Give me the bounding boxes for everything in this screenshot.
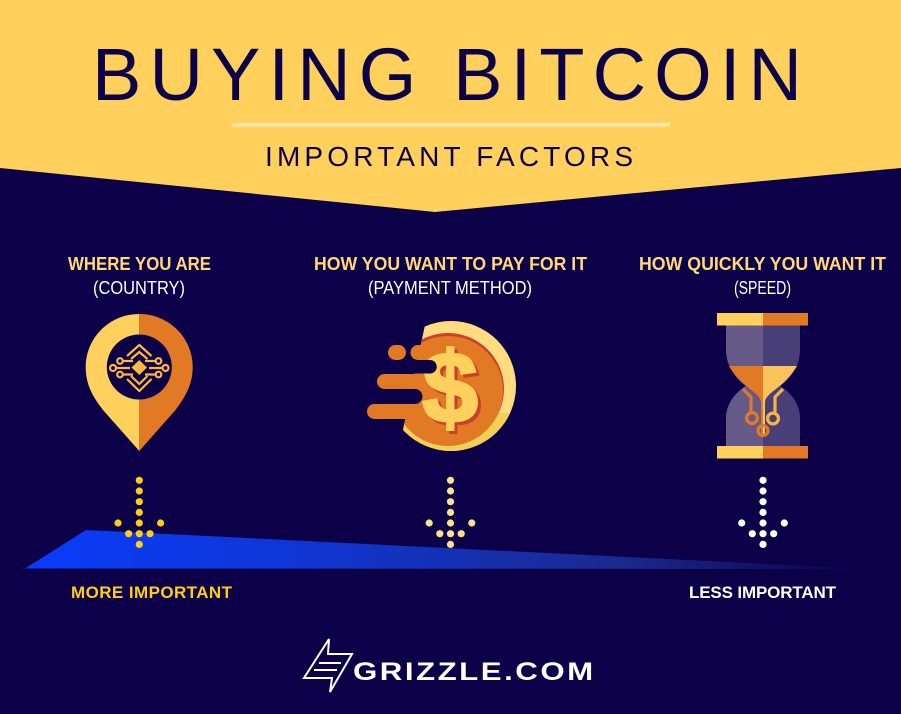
label: less important: LESS IMPORTANT (689, 583, 837, 602)
subtitle: IMPORTANT FACTORS (265, 141, 633, 172)
icon: location pin (86, 314, 193, 451)
icon: circuit traces (743, 389, 783, 436)
arrow: pale dots (426, 477, 475, 548)
arrow: yellow dots (114, 477, 164, 548)
column heading: payment method: HOW YOU WANT TO PAY FOR IT (314, 253, 588, 274)
icon: hourglass (717, 313, 808, 458)
column heading: speed (639, 253, 887, 298)
title underline (232, 123, 670, 126)
wordmark: GRIZZLE.COM (353, 657, 596, 685)
importance ramp (25, 530, 868, 569)
label: more important: MORE IMPORTANT (71, 583, 233, 602)
bottom cap (717, 446, 763, 458)
dollar sign: $ (425, 335, 481, 447)
arrow: white dots (738, 477, 788, 548)
icon: dollar coin: $ (422, 332, 478, 444)
title: BUYING BITCOIN (92, 33, 802, 116)
column heading: payment method: (PAYMENT METHOD) (368, 278, 532, 298)
top cap (717, 313, 763, 326)
column heading: country: WHERE YOU ARE (68, 253, 211, 274)
speed lines (388, 345, 406, 360)
icon: circuit diamond (110, 345, 168, 391)
column heading: speed: (SPEED) (734, 278, 791, 298)
icon: dollar coin (367, 321, 520, 453)
column heading: payment method (314, 253, 588, 298)
column heading: speed: HOW QUICKLY YOU WANT IT (639, 253, 887, 274)
logo: grizzle (304, 639, 596, 692)
column heading: country: (COUNTRY) (93, 278, 185, 298)
column heading: country (68, 253, 211, 298)
header banner (0, 0, 901, 212)
icon: logo bolt (304, 639, 352, 692)
